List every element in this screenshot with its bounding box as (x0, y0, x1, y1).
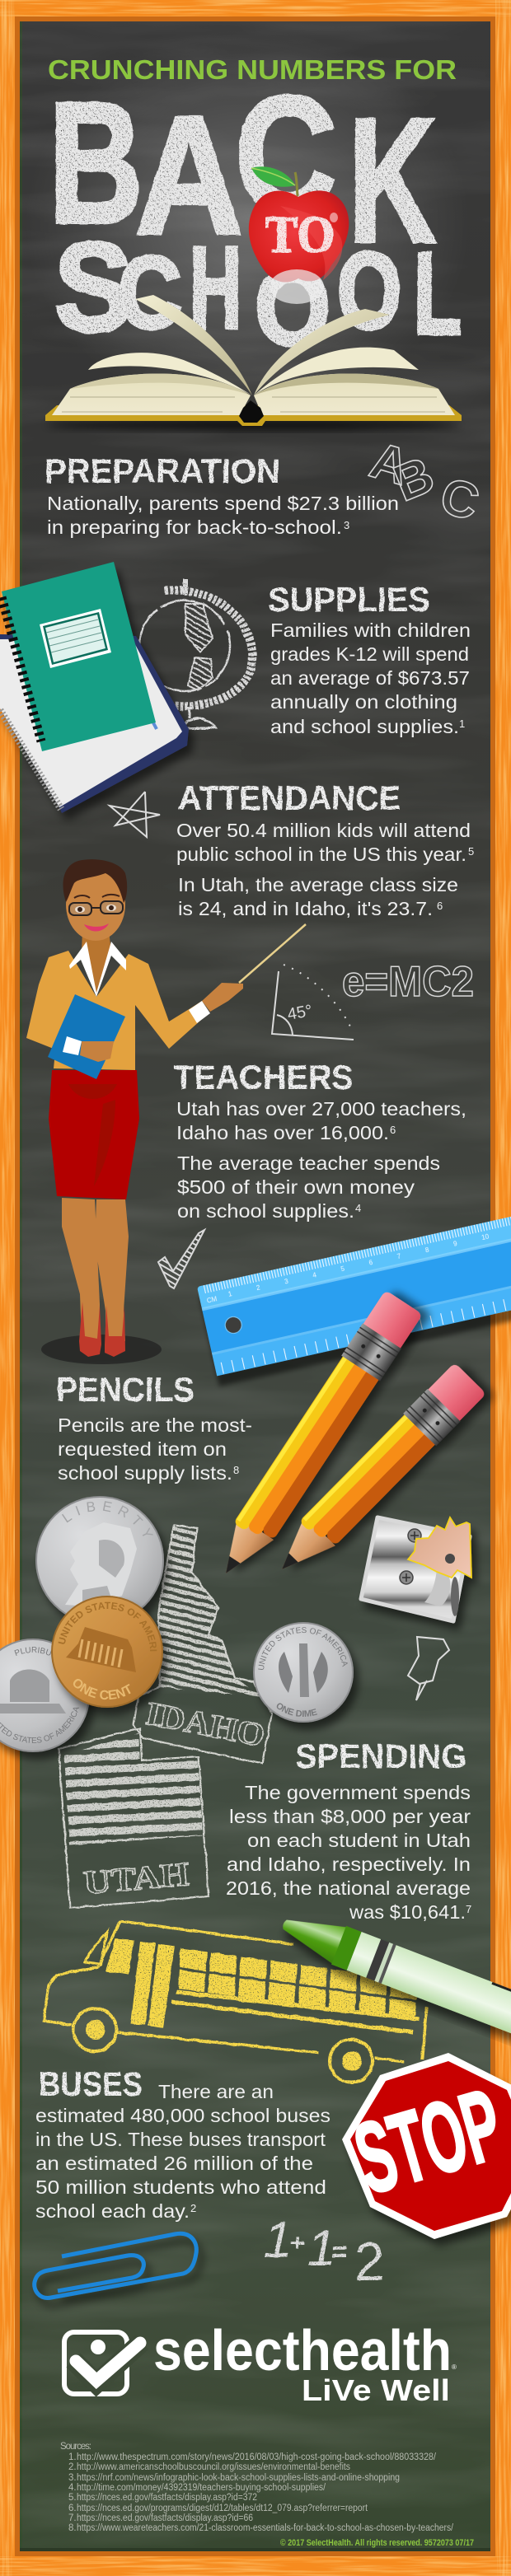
ruler: 4 (312, 1271, 317, 1279)
coin: penny: UNITED STATES OF AMERICA (58, 1601, 157, 1651)
coin: dime: UNITED STATES OF AMERICA (258, 1627, 348, 1670)
text: spending body: on each student in Utah (247, 1830, 471, 1851)
heading: BACK SCHOOL chalk letters: A (135, 82, 243, 269)
text: teachers body: on school supplies. (177, 1200, 354, 1222)
icon: open book (45, 295, 462, 431)
coin: nickel (0, 1639, 96, 1763)
chalk letters ABC: C (434, 467, 485, 532)
chalk equation (264, 2212, 385, 2292)
icon: chalk push pin (408, 1637, 449, 1700)
pencil shaving (408, 1517, 471, 1578)
sources: 3. (68, 2473, 77, 2483)
sources: 1. (68, 2452, 77, 2462)
neck (82, 931, 111, 993)
text: teachers body: 4 (355, 1202, 361, 1214)
map: Idaho chalk (134, 1525, 272, 1764)
text: attendance body: In Utah, the average class size (178, 874, 458, 895)
chalk equation: 1 (307, 2220, 335, 2277)
heading: BACK SCHOOL chalk letters (49, 63, 462, 367)
chalk letters ABC (364, 432, 485, 532)
map: Utah chalk (59, 1728, 209, 1908)
sources: 8. (68, 2523, 77, 2533)
pencil 2 (265, 1362, 487, 1586)
right hand and cuff (202, 983, 243, 1012)
icon: apple: TO (265, 205, 335, 264)
text: buses body: 50 million students who attend (35, 2176, 326, 2198)
notebook back page (0, 634, 189, 845)
text: buses body: estimated 480,000 school buses (35, 2105, 331, 2126)
ruler (197, 1211, 511, 1376)
chalk equation: 2 (354, 2231, 385, 2292)
text: supplies body: annually on clothing (270, 691, 457, 713)
text: pencils body: requested item on (58, 1438, 227, 1460)
text: teachers body: 6 (390, 1124, 396, 1136)
text: supplies body: Families with children (270, 619, 471, 641)
text: buses body: in the US. These buses transport (35, 2129, 326, 2150)
coin: dime (252, 1622, 362, 1733)
collar (69, 942, 126, 997)
sources: https://nrf.com/news/infographic-look-back-school-supplies-lists-and-online-shopping (77, 2473, 400, 2483)
ruler: CM (206, 1295, 218, 1305)
stop sign (342, 2053, 511, 2239)
ruler: 6 (368, 1259, 374, 1267)
text: preparation body: Nationally, parents spend $27.3 billion (47, 493, 399, 514)
ruler: 5 (340, 1265, 345, 1273)
spiral binding (2, 597, 41, 741)
sources: Sources: (60, 2442, 91, 2452)
text: buses body: There are an (158, 2081, 274, 2102)
heading: pencils: PENCILS (56, 1370, 195, 1409)
chalk formula: e=MC2 (342, 958, 474, 1006)
heading: preparation: PREPARATION (45, 451, 280, 490)
text: attendance body: is 24, and in Idaho, it's 23.7. (178, 898, 433, 919)
ruler: 7 (396, 1252, 402, 1260)
coin: dime: ONE DIME (277, 1703, 317, 1717)
sources: 2. (68, 2462, 77, 2472)
legs (62, 1198, 129, 1344)
chalk letters ABC: B (387, 446, 442, 512)
map: Utah chalk: UTAH (82, 1855, 190, 1901)
coin: quarter (35, 1496, 175, 1620)
heading: supplies: SUPPLIES (268, 580, 430, 619)
text: teachers body: $500 of their own money (177, 1176, 415, 1198)
text: spending body: was $10,641. (349, 1901, 466, 1923)
text: supplies body: grades K-12 will spend (270, 643, 469, 665)
icon: chalk star (110, 792, 160, 837)
text: teachers body (176, 1098, 466, 1222)
sources (60, 2442, 454, 2533)
text: attendance body: Over 50.4 million kids will attend (176, 820, 471, 841)
heading: BACK SCHOOL chalk letters: B (49, 68, 143, 259)
shoes (79, 1302, 125, 1357)
coin: penny: ONE CENT (73, 1679, 131, 1700)
text: preparation body: 3 (344, 519, 349, 531)
heading: BACK SCHOOL chalk letters: H (190, 222, 241, 353)
coin: quarter: LIBERTY (62, 1501, 153, 1536)
ruler: 2 (256, 1283, 261, 1292)
ruler: 8 (424, 1246, 430, 1254)
text: attendance body: public school in the US this year. (176, 844, 466, 865)
coin: nickel: PLURIBUS UNUM (15, 1647, 51, 1656)
title: CRUNCHING NUMBERS FOR (48, 54, 457, 85)
sources: 7. (68, 2513, 77, 2523)
text: spending body (226, 1782, 471, 1923)
map: Idaho chalk: IDAHO (143, 1695, 268, 1754)
logo: SelectHealth: ® (452, 2363, 457, 2371)
text: pencils body (58, 1414, 252, 1484)
heading: attendance: ATTENDANCE (178, 778, 401, 817)
text: teachers body: The average teacher spends (177, 1152, 440, 1174)
coin: penny (51, 1596, 173, 1718)
heading: BACK SCHOOL chalk letters: O (337, 230, 401, 351)
floor shadow (41, 1335, 162, 1364)
text: buses body: 2 (190, 2202, 196, 2214)
head (66, 868, 125, 941)
sweater and arms (26, 951, 209, 1070)
icon: chalk triangle 45 degrees (272, 965, 354, 1040)
pointer (239, 924, 306, 983)
text: supplies body: and school supplies. (270, 716, 459, 737)
notebook label (40, 609, 111, 668)
hair (63, 859, 127, 903)
icon: paper clip (35, 2233, 196, 2298)
copyright: © 2017 SelectHealth. All rights reserved. 9572073 07/17 (280, 2538, 474, 2548)
text: spending body: The government spends (245, 1782, 471, 1803)
chalk equation: + (290, 2230, 305, 2257)
heading: teachers: TEACHERS (174, 1058, 354, 1096)
icon: teacher (26, 859, 306, 1364)
heading: buses: BUSES (39, 2064, 143, 2103)
sources: https://www.weareteachers.com/21-classroom-essentials-for-back-to-school-as-chosen-by-teachers/ (77, 2523, 454, 2533)
text: preparation body: in preparing for back-to-school. (47, 517, 342, 538)
sources: http://www.thespectrum.com/story/news/2016/08/03/high-cost-going-back-school/88033328/ (77, 2452, 437, 2462)
mouth (84, 923, 109, 932)
text: attendance body: 5 (468, 845, 474, 858)
skirt (49, 1070, 139, 1199)
logo: SelectHealth (64, 2318, 457, 2407)
sources: 5. (68, 2493, 77, 2503)
text: attendance body (176, 820, 474, 919)
ruler: 9 (452, 1240, 458, 1248)
icon: crayon (276, 1905, 511, 2064)
ruler: 10 (481, 1232, 490, 1241)
left hand and cuff (80, 1041, 114, 1062)
text: pencils body: school supply lists. (58, 1462, 232, 1484)
sources: http://www.americanschoolbuscouncil.org/issues/environmental-benefits (77, 2462, 350, 2472)
text: buses body (35, 2081, 331, 2222)
heading: BACK SCHOOL chalk letters: C (235, 63, 337, 246)
text: supplies body: 1 (459, 718, 465, 730)
text: teachers body: Idaho has over 16,000. (176, 1122, 389, 1143)
icon: apple (249, 166, 349, 304)
pencil 1 (207, 1289, 424, 1586)
icon: chalk globe (139, 579, 252, 728)
sources: 4. (68, 2483, 77, 2493)
sources: https://nces.ed.gov/fastfacts/display.asp?id=66 (77, 2513, 253, 2523)
ruler: 1 (227, 1290, 233, 1298)
logo wordmark: selecthealth (153, 2318, 452, 2382)
text: buses body: school each day. (35, 2200, 190, 2222)
text: spending body: and Idaho, respectively. In (227, 1854, 471, 1875)
blue folder (48, 994, 125, 1079)
chalk equation: = (331, 2237, 348, 2268)
sources: http://time.com/money/4392319/teachers-buying-school-supplies/ (77, 2483, 326, 2493)
icon: chalk check mark (158, 1230, 204, 1288)
chalk equation: 1 (264, 2212, 292, 2269)
text: preparation body (47, 493, 399, 538)
text: supplies body (270, 619, 471, 737)
heading: spending: SPENDING (295, 1737, 466, 1775)
heading: BACK SCHOOL chalk letters: K (349, 82, 436, 279)
sources: https://nces.ed.gov/programs/digest/d12/tables/dt12_079.asp?referrer=report (77, 2504, 368, 2513)
sharpener (361, 1517, 471, 1621)
glasses (69, 895, 123, 915)
logo tagline: LiVe Well (302, 2373, 450, 2407)
text: spending body: 2016, the national average (226, 1877, 471, 1899)
text: pencils body: 8 (233, 1464, 239, 1476)
icon: chalk school bus (44, 1921, 427, 2083)
sources: https://nces.ed.gov/fastfacts/display.asp?id=372 (77, 2493, 257, 2503)
text: pencils body: Pencils are the most- (58, 1414, 252, 1436)
text: teachers body: Utah has over 27,000 teachers, (176, 1098, 466, 1120)
icon: notebook (0, 562, 189, 845)
notebook green cover (2, 562, 156, 751)
heading: BACK SCHOOL chalk letters: O (255, 246, 331, 367)
text: spending body: 7 (466, 1903, 471, 1915)
ruler: 3 (284, 1278, 289, 1286)
heading: BACK SCHOOL chalk letters: C (118, 236, 182, 350)
heading: BACK SCHOOL chalk letters: L (414, 228, 462, 359)
chalk letters ABC: A (364, 432, 415, 497)
text: buses body: an estimated 26 million of the (35, 2153, 313, 2174)
text: supplies body: an average of $673.57 (270, 667, 470, 689)
sources: 6. (68, 2504, 77, 2513)
logo mark (64, 2332, 142, 2394)
text: attendance body: 6 (437, 900, 443, 912)
heading: BACK SCHOOL chalk letters: S (54, 217, 133, 358)
icon: chalk triangle 45 degrees: 45° (286, 1002, 314, 1024)
text: spending body: less than $8,000 per year (229, 1806, 471, 1827)
